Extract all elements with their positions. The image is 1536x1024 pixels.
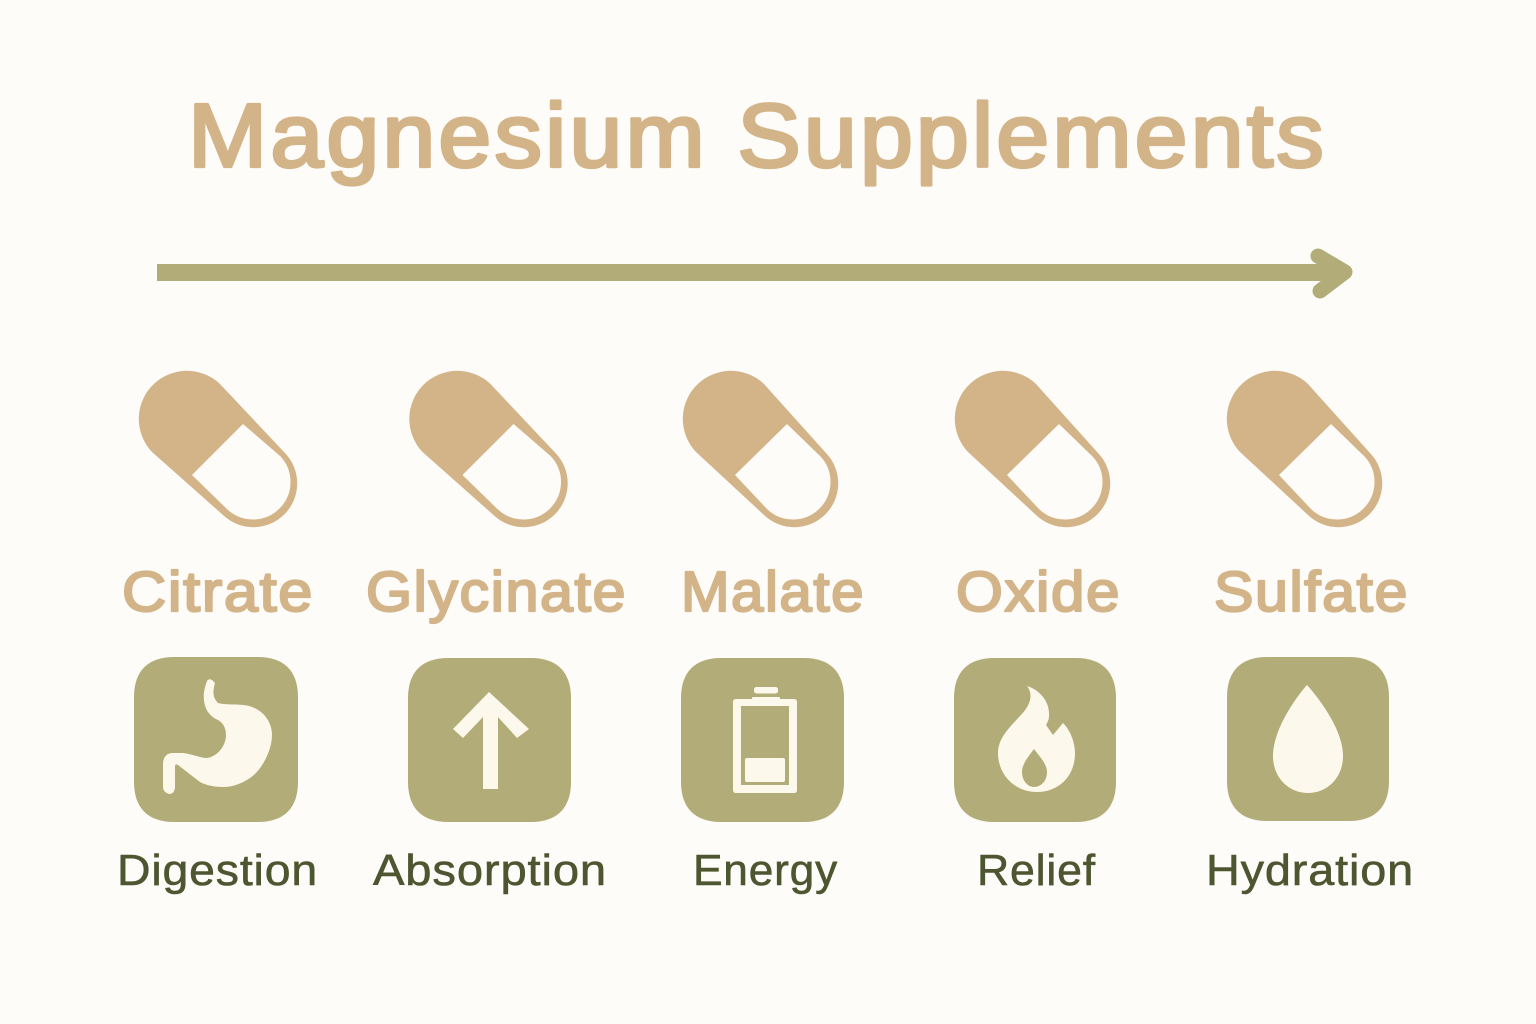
icon: battery tile: [681, 658, 844, 822]
column: Citrate / Digestion: [117, 371, 318, 895]
column: Malate / Energy: [681, 371, 865, 895]
icon: stomach tile: [134, 657, 298, 822]
column: Oxide / Relief: [954, 371, 1121, 895]
column: Sulfate / Hydration: [1206, 371, 1414, 895]
title: Magnesium Supplements: [188, 86, 1327, 186]
icon: capsule: [955, 371, 1110, 527]
icon: capsule: [683, 371, 838, 527]
icon: capsule: [1227, 371, 1382, 527]
label: Hydration: Hydration: [1206, 846, 1414, 895]
arrow: progression: [157, 256, 1345, 291]
label: Malate: Malate: [681, 560, 865, 624]
icon: flame tile: [954, 658, 1116, 822]
label: Sulfate: Sulfate: [1214, 560, 1409, 624]
label: Oxide: Oxide: [956, 560, 1121, 624]
label: Citrate: Citrate: [122, 560, 314, 624]
label: Absorption: Absorption: [373, 846, 607, 895]
label: Glycinate: Glycinate: [366, 560, 627, 624]
label: Energy: Energy: [693, 846, 838, 895]
icon: capsule: [409, 371, 568, 527]
icon: up arrow tile: [408, 658, 571, 822]
label: Relief: Relief: [977, 846, 1096, 895]
icon: water drop tile: [1227, 657, 1389, 821]
column: Glycinate / Absorption: [366, 371, 627, 895]
label: Digestion: Digestion: [117, 846, 318, 895]
icon: capsule: [139, 371, 297, 527]
